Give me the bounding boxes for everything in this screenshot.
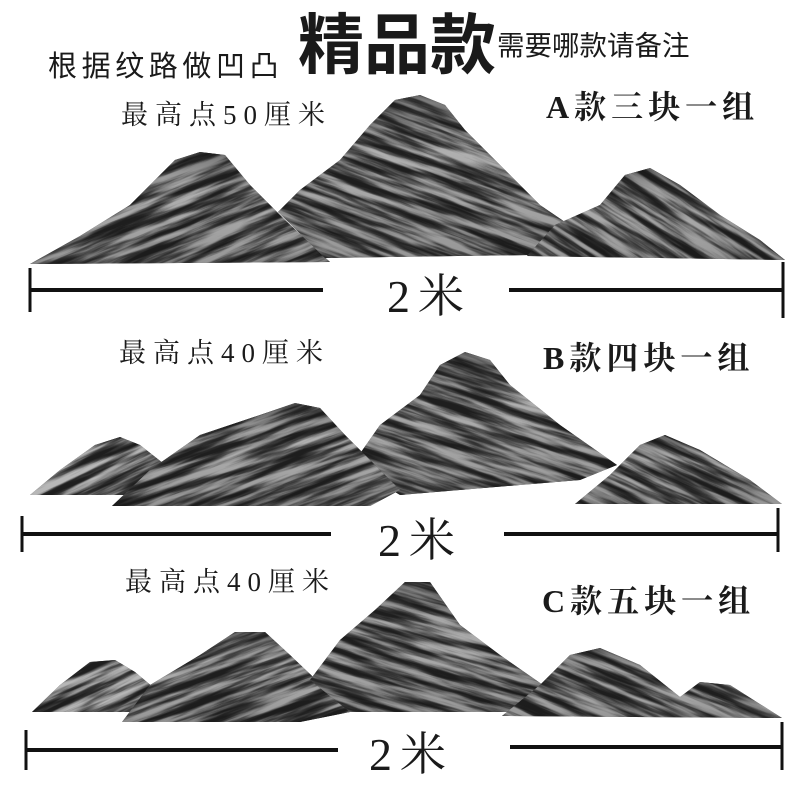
group A ruler: [30, 262, 783, 318]
group C rocks: [32, 582, 782, 722]
group B ruler: [22, 508, 778, 552]
rock B far left: [30, 437, 162, 495]
rock B right: [575, 435, 782, 504]
group C length: 2米: [369, 729, 454, 780]
left note: 根据纹路做凹凸: [48, 43, 283, 85]
rock C second: [122, 632, 350, 722]
rock C third: [310, 582, 542, 712]
rock A middle: [278, 95, 564, 258]
rock C far left: [32, 660, 150, 712]
group B rocks: [30, 352, 782, 506]
rock B third: [362, 352, 617, 495]
group C name: C款五块一组: [542, 583, 755, 619]
rock A right: [527, 168, 785, 260]
group A rocks: [30, 95, 785, 264]
group B name: B款四块一组: [543, 340, 754, 376]
group B height label: 最高点40厘米: [119, 338, 330, 368]
rock C right: [502, 648, 782, 718]
rock A left: [30, 152, 330, 264]
rock B second: [112, 403, 400, 506]
group A length: 2米: [387, 271, 472, 322]
group C height label: 最高点40厘米: [125, 567, 336, 597]
group C ruler: [26, 722, 782, 770]
group A height label: 最高点50厘米: [121, 100, 332, 130]
right note: 需要哪款请备注: [497, 23, 690, 63]
group A name: A款三块一组: [546, 89, 759, 125]
group B length: 2米: [378, 515, 463, 566]
